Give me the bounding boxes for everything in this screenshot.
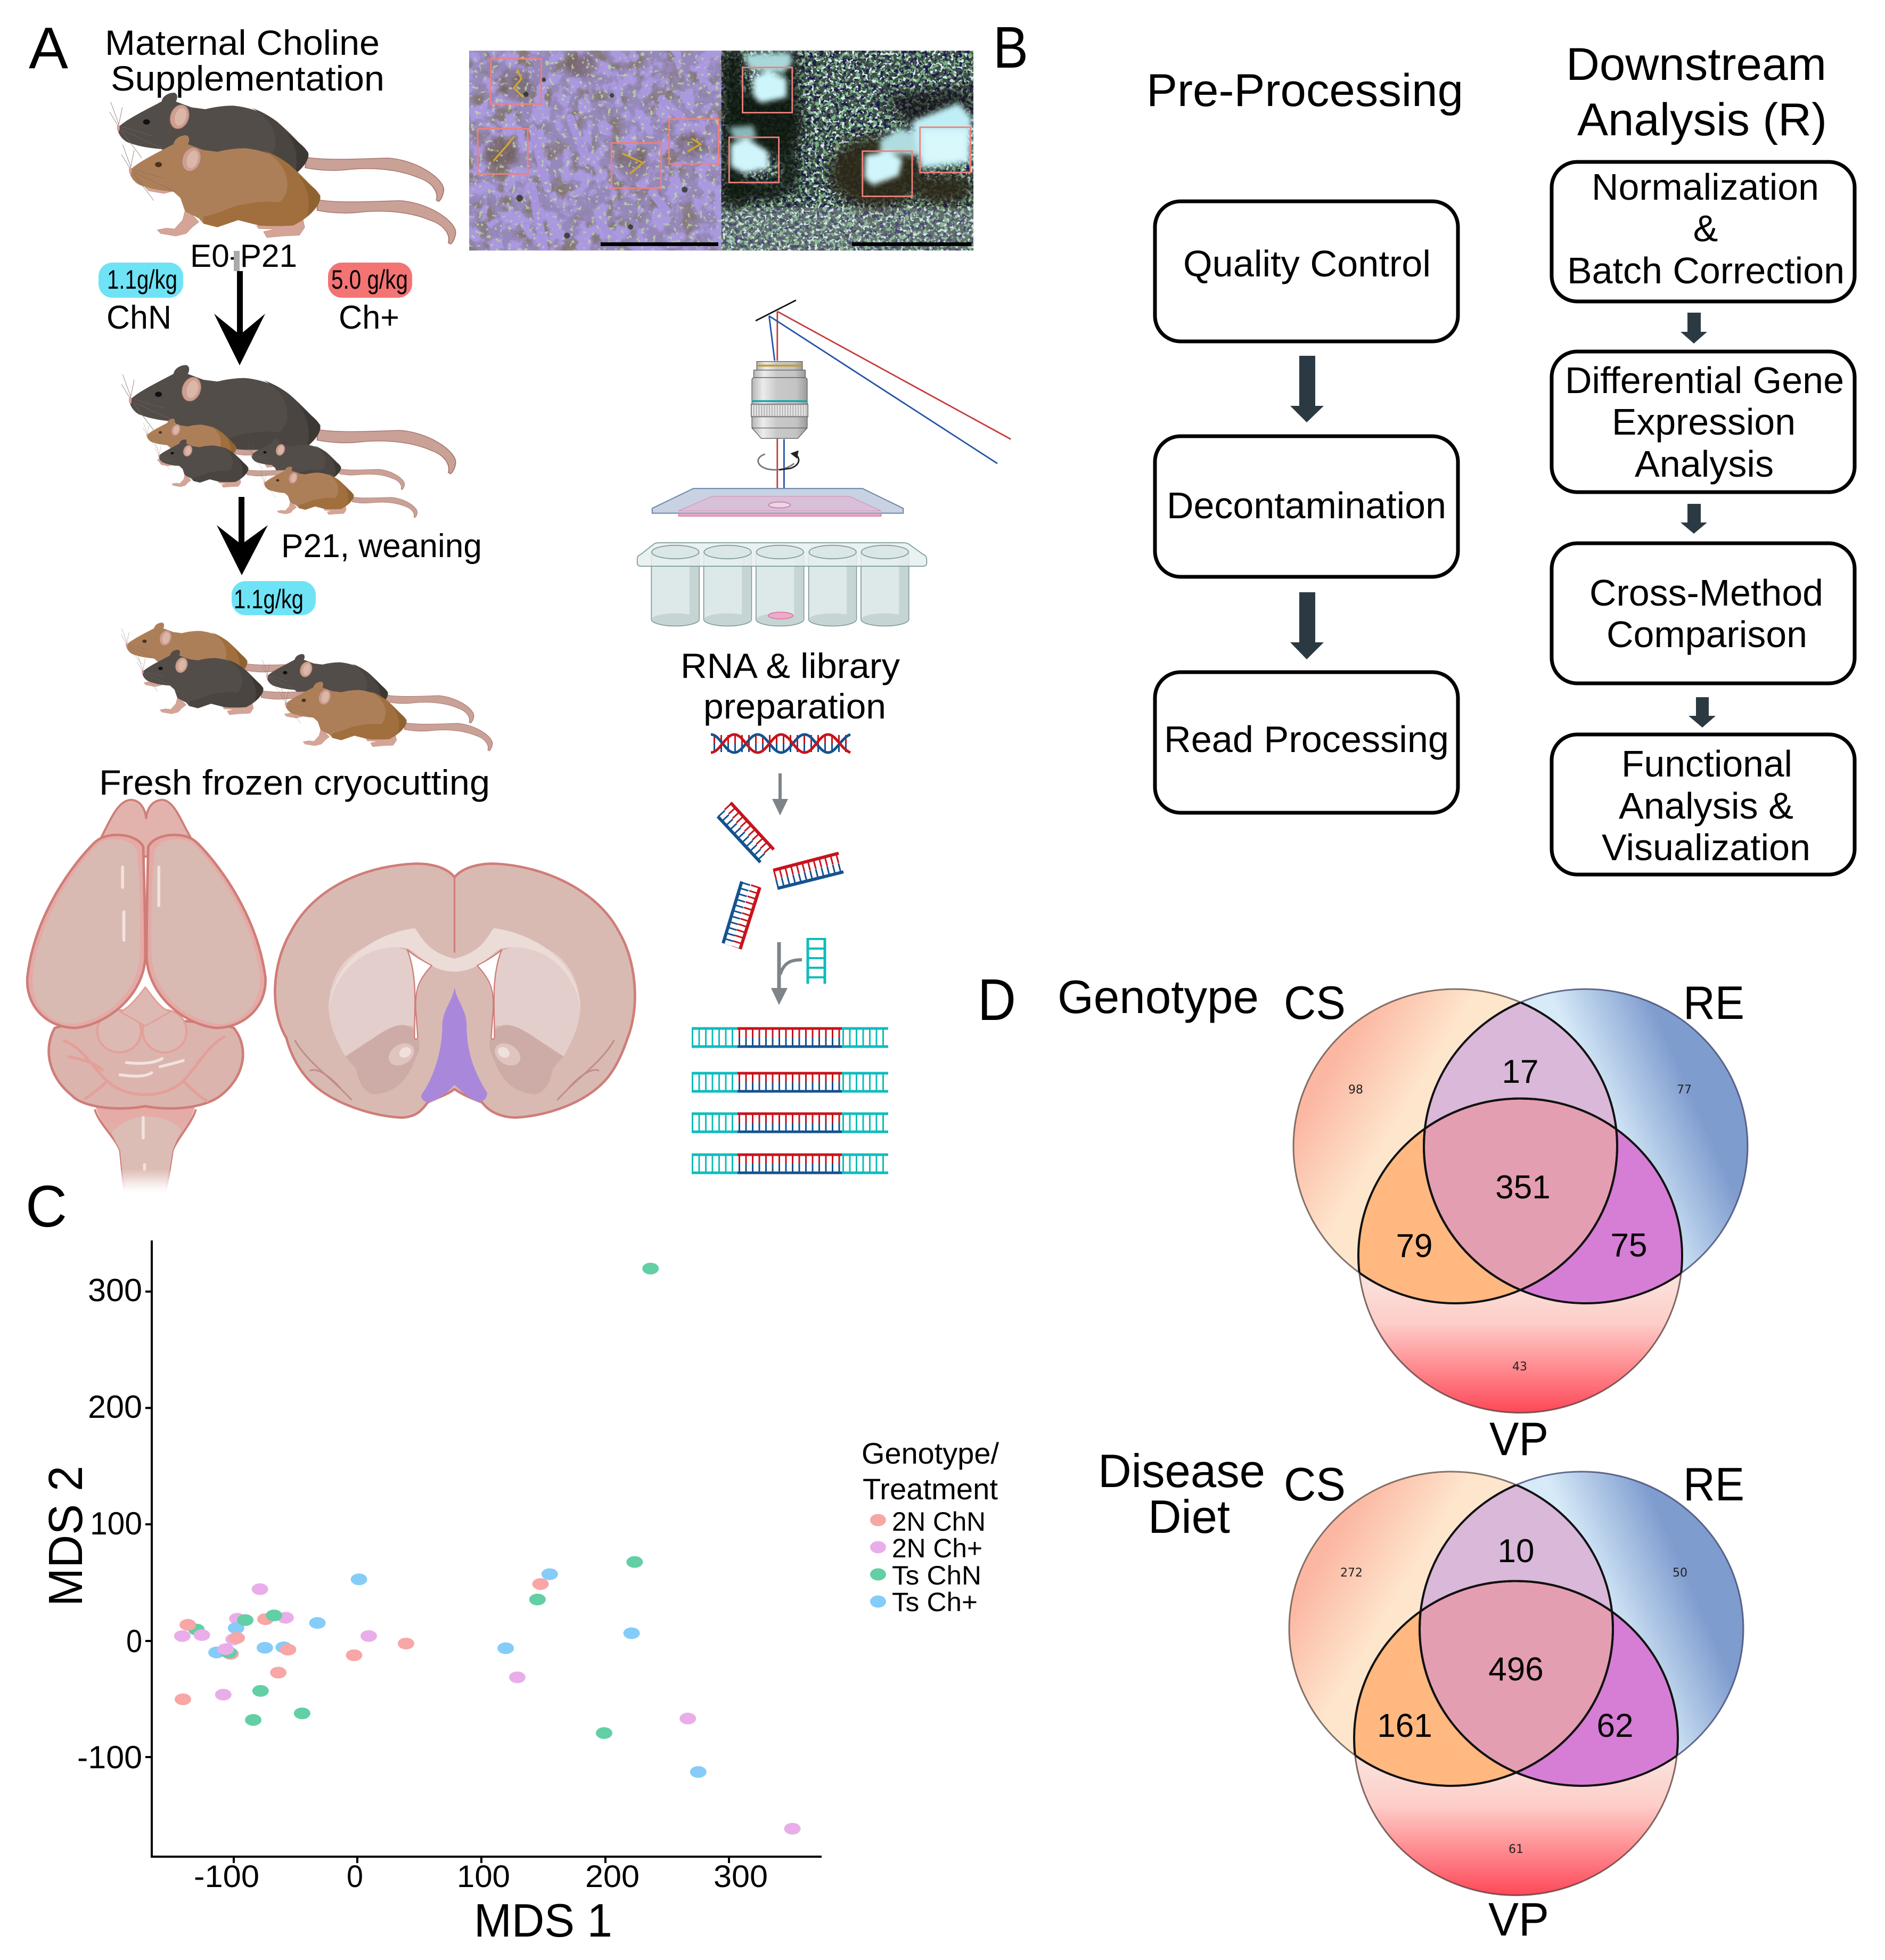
region counts: 10 (1498, 1533, 1534, 1570)
step: Decontamination: Decontamination (1167, 485, 1446, 526)
x axis tick labels: 100 (457, 1859, 510, 1894)
step: Read Processing (1155, 672, 1458, 813)
set label VP: VP (1489, 1412, 1548, 1465)
step: Decontamination (1155, 436, 1458, 577)
set label RE: RE (1683, 1458, 1744, 1510)
label: Ch+: Ch+ (339, 299, 399, 336)
heading: RNA and library preparation: RNA & library (681, 646, 900, 685)
panel letter D: D (978, 967, 1016, 1033)
step: differential gene expression: Differential Gene (1565, 360, 1844, 401)
scatter points (174, 1263, 801, 1834)
region counts: 79 (1396, 1228, 1432, 1264)
illustration: laser capture optics (652, 300, 1011, 516)
column: downstream analysis (1552, 39, 1855, 875)
pill: 1.1 g/kg ChN diet (99, 263, 183, 298)
heading: Downstream Analysis (R): Downstream (1566, 39, 1826, 90)
icon: parent mice pair (110, 93, 456, 244)
step: functional analysis and visualization: Visualization (1602, 827, 1810, 868)
step: Quality Control: Quality Control (1183, 243, 1431, 284)
x axis tick labels: -100 (194, 1859, 259, 1894)
step: differential gene expression: Expression (1612, 401, 1796, 443)
x axis title: MDS 1 (474, 1894, 612, 1947)
panel letter C: C (26, 1174, 67, 1239)
illustration: coronal brain section (275, 864, 635, 1117)
heading: fresh frozen cryocutting: Fresh frozen cryocutting (99, 763, 490, 802)
icon: dam with pups (121, 365, 456, 518)
heading: maternal choline supplementation (105, 23, 384, 98)
heading: RNA and library preparation (681, 646, 900, 726)
series: 2N Ch+ (215, 1583, 801, 1834)
illustration: DNA fragments (718, 803, 843, 949)
y axis tick labels: 200 (88, 1389, 142, 1425)
series: 2N ChN (175, 1578, 549, 1705)
x axis tick labels (194, 1859, 768, 1894)
heading: Disease Diet: Disease (1098, 1444, 1265, 1497)
micrograph: tissue section before capture (469, 51, 722, 250)
arrow: adapter ligation (771, 942, 802, 1005)
region counts: 17 (1502, 1054, 1538, 1090)
illustration: dorsal brain (27, 800, 266, 1195)
heading: Disease Diet (1098, 1444, 1265, 1543)
y axis title: MDS 2 (39, 1466, 93, 1606)
legend (862, 1436, 999, 1617)
axes (145, 1240, 822, 1863)
region counts: 98 (1348, 1083, 1363, 1097)
arrow: to differential expression (1681, 313, 1707, 344)
heading: RNA and library preparation: preparation (703, 687, 886, 726)
heading: maternal choline supplementation: Supplementation (111, 59, 384, 98)
y axis tick labels: 300 (88, 1272, 142, 1308)
illustration: final sequencing libraries (692, 1028, 888, 1173)
icon: adapter ladder (808, 938, 825, 984)
series: Ts ChN (245, 1263, 659, 1739)
series: Ts Ch+ (257, 1569, 707, 1778)
region counts: 351 (1495, 1169, 1551, 1206)
arrow: to functional analysis (1689, 697, 1716, 728)
legend: Ts ChN (892, 1561, 981, 1590)
arrow: to decontamination (1290, 356, 1324, 422)
arrow: weaning (217, 497, 268, 575)
microscope images with capture boxes (469, 51, 1011, 626)
set label VP: VP (1488, 1893, 1549, 1946)
x axis tick labels: 300 (714, 1859, 768, 1894)
label: P21, weaning: P21, weaning (281, 528, 482, 565)
step: normalization and batch correction (1552, 162, 1855, 301)
pill: 1.1 g/kg ChN diet: 1.1g/kg (107, 265, 177, 295)
x axis tick labels: 200 (585, 1859, 640, 1894)
region counts: 61 (1509, 1843, 1523, 1856)
y axis tick labels: -100 (77, 1740, 142, 1775)
step: functional analysis and visualization (1552, 734, 1855, 875)
heading: Disease Diet: Diet (1148, 1490, 1230, 1543)
legend: 2N ChN (892, 1507, 986, 1537)
panel letter B: B (993, 15, 1028, 80)
arrow: gestation to litter (214, 251, 265, 365)
region counts: 77 (1677, 1083, 1692, 1097)
step: Read Processing: Read Processing (1164, 718, 1449, 760)
capture boxes (478, 59, 970, 197)
y axis tick labels (77, 1272, 142, 1775)
y axis tick labels: 0 (126, 1623, 142, 1659)
set label CS: CS (1284, 1458, 1346, 1510)
panel D: Venn diagrams (978, 967, 1748, 1946)
step: differential gene expression: Analysis (1635, 443, 1774, 485)
x axis tick labels: 0 (347, 1859, 363, 1894)
set label CS: CS (1284, 976, 1346, 1029)
heading: Genotype: Genotype (1058, 970, 1259, 1023)
panel B: bioinformatics workflow (993, 15, 1855, 875)
illustration: DNA helix (711, 734, 850, 753)
overlapping cluster near the origin (174, 1610, 296, 1660)
y axis tick labels: 100 (90, 1506, 142, 1541)
region counts (1348, 1054, 1692, 1374)
step: cross-method comparison: Comparison (1607, 614, 1807, 655)
legend: 2N Ch+ (892, 1533, 982, 1563)
micrograph: tissue section after capture (719, 51, 973, 250)
Venn diagram: genotype (1284, 976, 1748, 1465)
heading: Downstream Analysis (R): Analysis (R) (1577, 94, 1827, 145)
set label RE: RE (1683, 976, 1744, 1029)
heading: Pre-Processing: Pre-Processing (1146, 65, 1463, 116)
heading: Downstream Analysis (R) (1566, 39, 1827, 145)
arrow: fragmentation (772, 773, 788, 815)
pill: 5.0 g/kg Ch+ diet: 5.0 g/kg (331, 265, 408, 295)
region counts: 161 (1377, 1708, 1432, 1744)
illustration: collection tube strip (637, 543, 927, 626)
region counts: 50 (1673, 1566, 1687, 1580)
arrow: to read processing (1290, 592, 1324, 659)
label: ChN: ChN (106, 299, 171, 336)
Venn diagram: disease diet (1284, 1458, 1744, 1946)
icon: weaned mice (121, 623, 493, 751)
region counts: 272 (1340, 1566, 1363, 1580)
legend: Genotype/ (862, 1436, 999, 1470)
legend: Ts Ch+ (892, 1587, 978, 1617)
step: Quality Control (1155, 201, 1458, 341)
label: E0-P21: E0-P21 (190, 238, 297, 274)
step: normalization and batch correction: Batch Correction (1567, 250, 1845, 291)
region counts (1340, 1533, 1687, 1856)
heading: maternal choline supplementation: Maternal Choline (105, 23, 380, 62)
region counts: 496 (1488, 1651, 1544, 1688)
step: normalization and batch correction: & (1693, 208, 1718, 249)
region counts: 43 (1512, 1360, 1527, 1374)
panel A: maternal choline supplementation (27, 15, 635, 1195)
arrow: to cross-method comparison (1681, 504, 1707, 534)
region counts: 75 (1611, 1227, 1647, 1264)
step: functional analysis and visualization: Analysis & (1619, 785, 1793, 827)
panel C: MDS scatter plot (26, 1174, 999, 1947)
step: cross-method comparison (1552, 543, 1855, 683)
step: normalization and batch correction: Normalization (1592, 166, 1819, 208)
column: pre-processing (1146, 65, 1463, 813)
step: cross-method comparison: Cross-Method (1589, 572, 1823, 614)
legend: Treatment (863, 1472, 998, 1506)
pill: 1.1 g/kg post-weaning: 1.1g/kg (234, 584, 304, 614)
region counts: 62 (1597, 1708, 1633, 1744)
step: functional analysis and visualization: Functional (1621, 743, 1792, 785)
scale bars (601, 242, 972, 246)
step: differential gene expression (1552, 352, 1855, 492)
panel letter A: A (29, 15, 69, 81)
